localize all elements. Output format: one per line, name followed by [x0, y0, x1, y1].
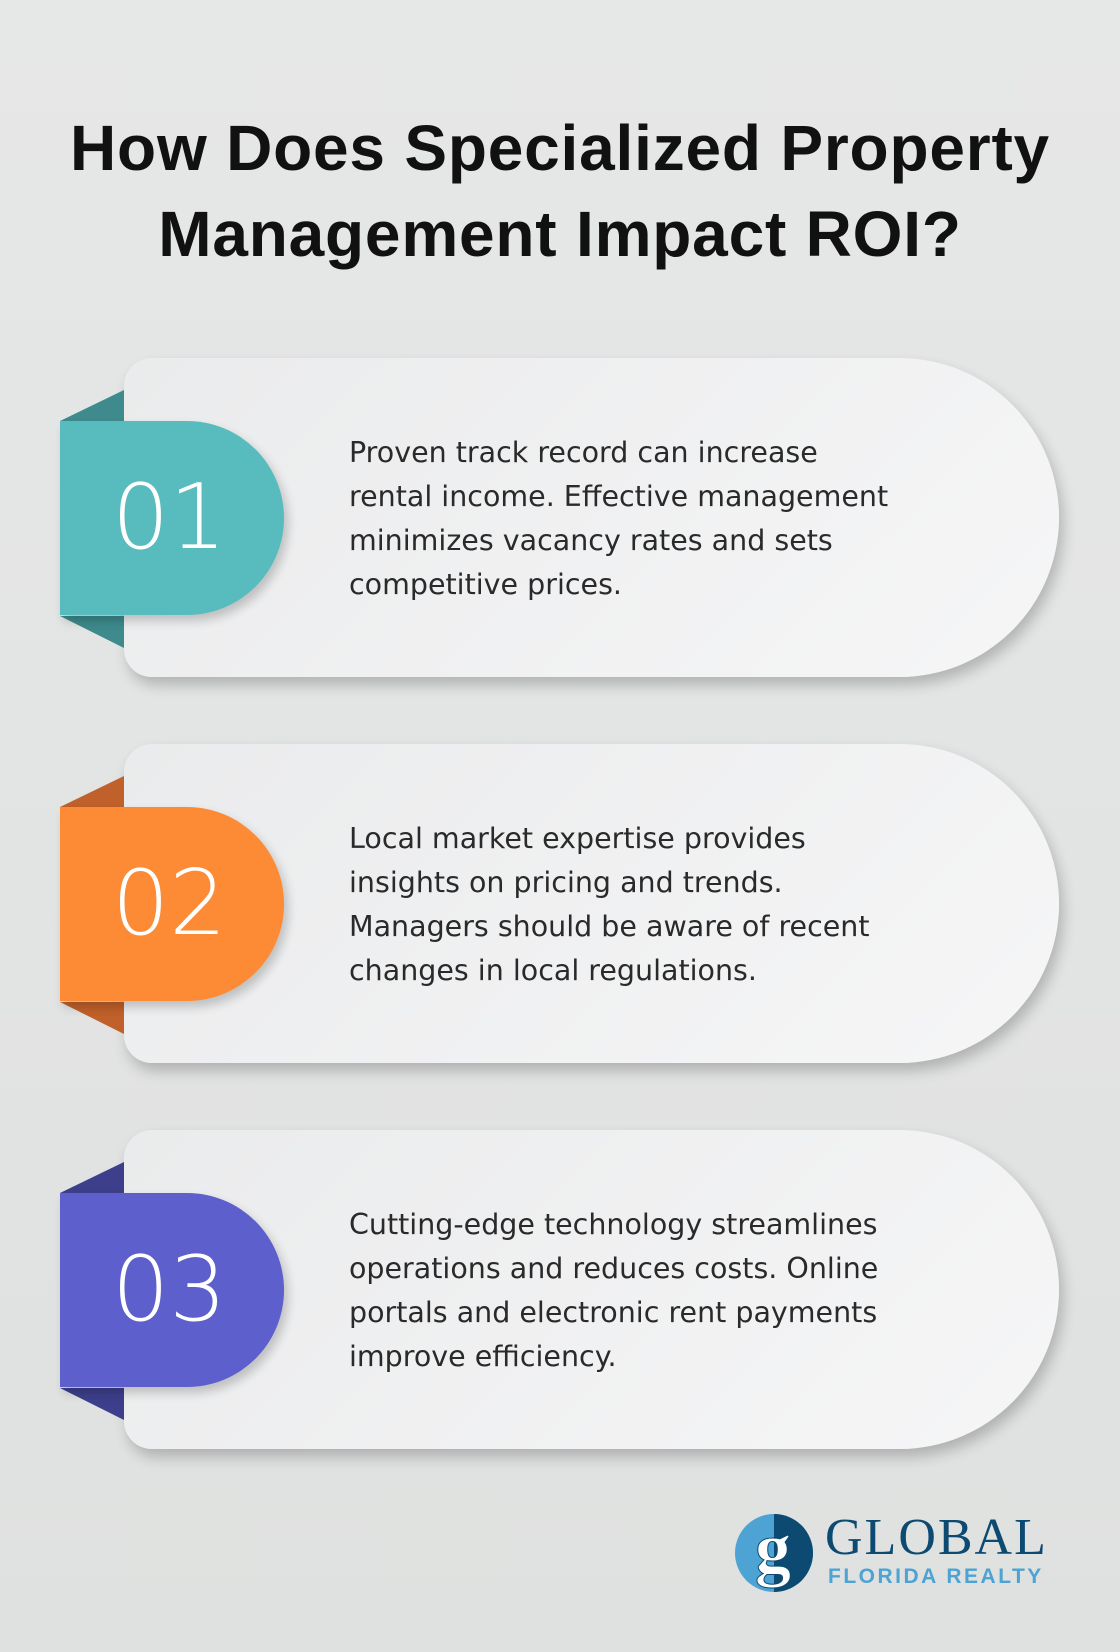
card 1 — [60, 358, 1070, 692]
title: How Does Specialized Property — [70, 112, 1050, 184]
text 3: Cutting-edge technology streamlines — [349, 1208, 877, 1241]
tab 02: 02 — [112, 851, 227, 956]
title — [70, 112, 1050, 270]
text 3: operations and reduces costs. Online — [349, 1252, 878, 1285]
text 2 — [349, 822, 870, 987]
FLORIDA REALTY: FLORIDA REALTY — [828, 1565, 1044, 1588]
card 3 — [60, 1130, 1069, 1464]
title: Management Impact ROI? — [158, 198, 962, 270]
text 1: minimizes vacancy rates and sets — [349, 524, 833, 557]
text 1: Proven track record can increase — [349, 436, 818, 469]
GLOBAL: GLOBAL — [825, 1509, 1048, 1566]
text 1: rental income. Effective management — [349, 480, 888, 513]
tab 03 — [60, 1193, 284, 1387]
text 1 — [349, 436, 888, 601]
card 2 — [60, 744, 1070, 1078]
tab 01: 01 — [112, 465, 227, 570]
logo — [735, 1509, 1048, 1592]
fold 2 — [60, 776, 124, 1034]
text 1: competitive prices. — [349, 568, 622, 601]
icon: g circle — [735, 1514, 813, 1592]
text 3: improve efficiency. — [349, 1340, 617, 1373]
text 2: insights on pricing and trends. — [349, 866, 783, 899]
fold 3 — [60, 1162, 124, 1420]
tab 03: 03 — [112, 1237, 227, 1342]
text 2: Local market expertise provides — [349, 822, 806, 855]
text 3 — [349, 1208, 878, 1373]
text 2: Managers should be aware of recent — [349, 910, 870, 943]
fold 1 — [60, 390, 124, 648]
text 3: portals and electronic rent payments — [349, 1296, 877, 1329]
tab 02 — [60, 807, 284, 1001]
text 2: changes in local regulations. — [349, 954, 757, 987]
tab 01 — [60, 421, 284, 615]
